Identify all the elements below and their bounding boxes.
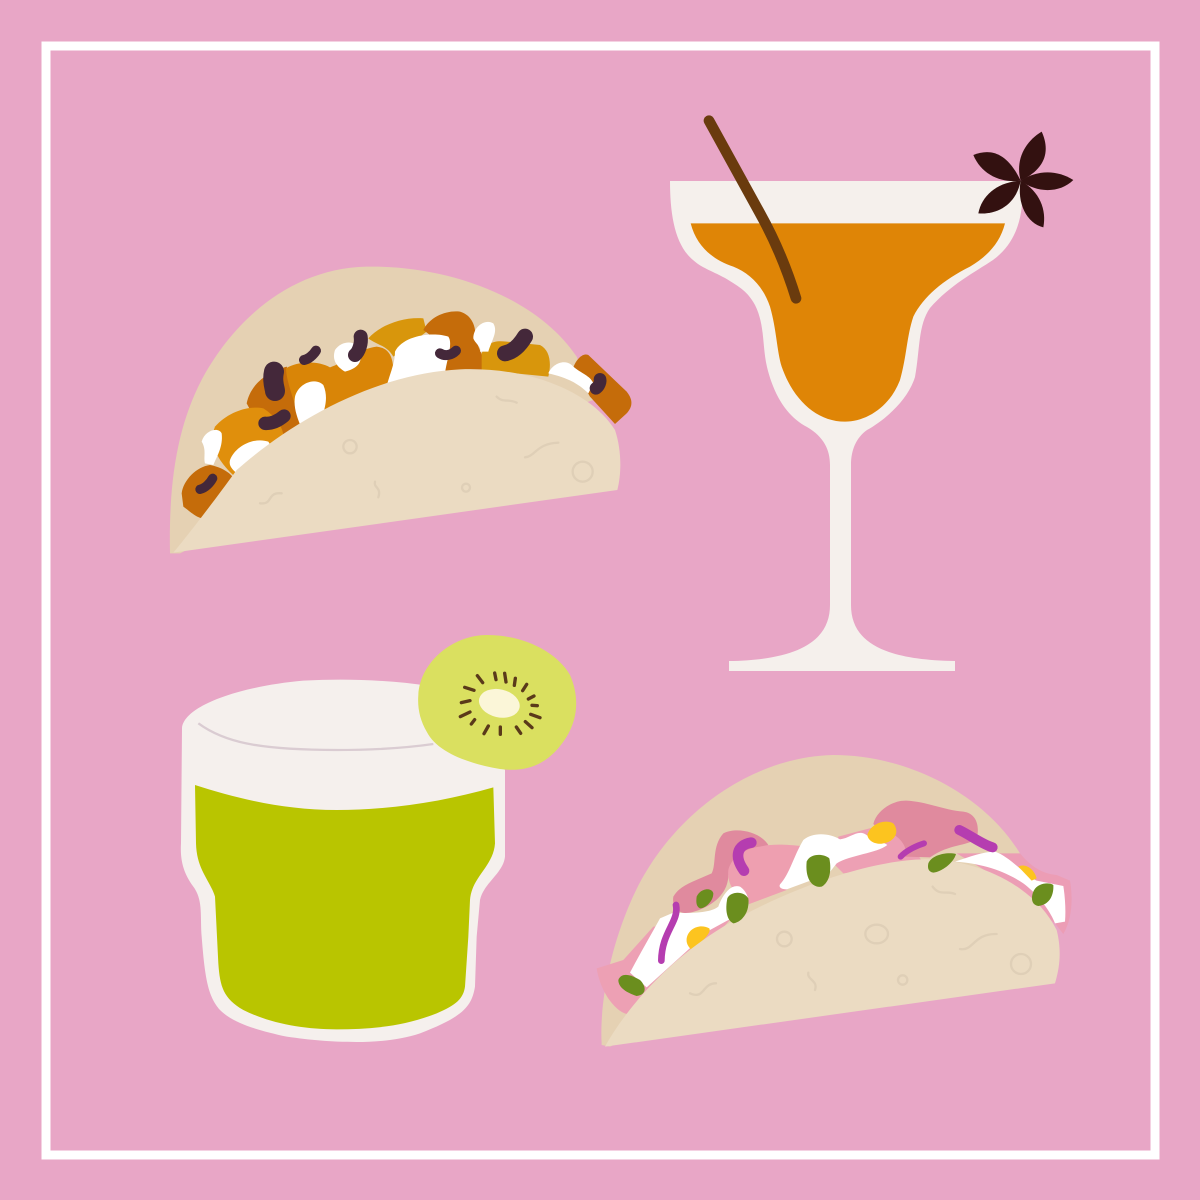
cocktail: green drink tumbler — [181, 635, 576, 1042]
back shell — [601, 755, 1023, 1047]
rim line — [198, 723, 433, 750]
taco: pink slaw — [597, 755, 1072, 1047]
green drink — [195, 785, 495, 1029]
shell texture — [690, 887, 1031, 995]
glass outline — [670, 181, 1022, 671]
kiwi seeds — [460, 673, 540, 734]
white crema — [630, 833, 1065, 987]
kiwi slice — [418, 635, 576, 770]
taco: beans and squash — [170, 267, 631, 553]
cinnamon stick — [709, 121, 796, 298]
back shell — [170, 267, 593, 553]
front shell — [173, 369, 620, 553]
corn — [687, 822, 1037, 950]
filling chunks — [182, 311, 631, 518]
cocktail: margarita glass — [670, 121, 1073, 671]
shell texture — [260, 397, 593, 503]
green pepitas — [618, 853, 1053, 996]
star anise — [973, 132, 1073, 227]
purple cabbage — [661, 830, 993, 961]
pink layers — [597, 801, 1072, 1014]
white cheese — [202, 322, 593, 475]
orange drink — [691, 121, 1073, 422]
front shell — [605, 859, 1060, 1047]
glass body — [181, 680, 505, 1042]
kiwi core — [476, 685, 523, 722]
black beans — [200, 337, 600, 489]
